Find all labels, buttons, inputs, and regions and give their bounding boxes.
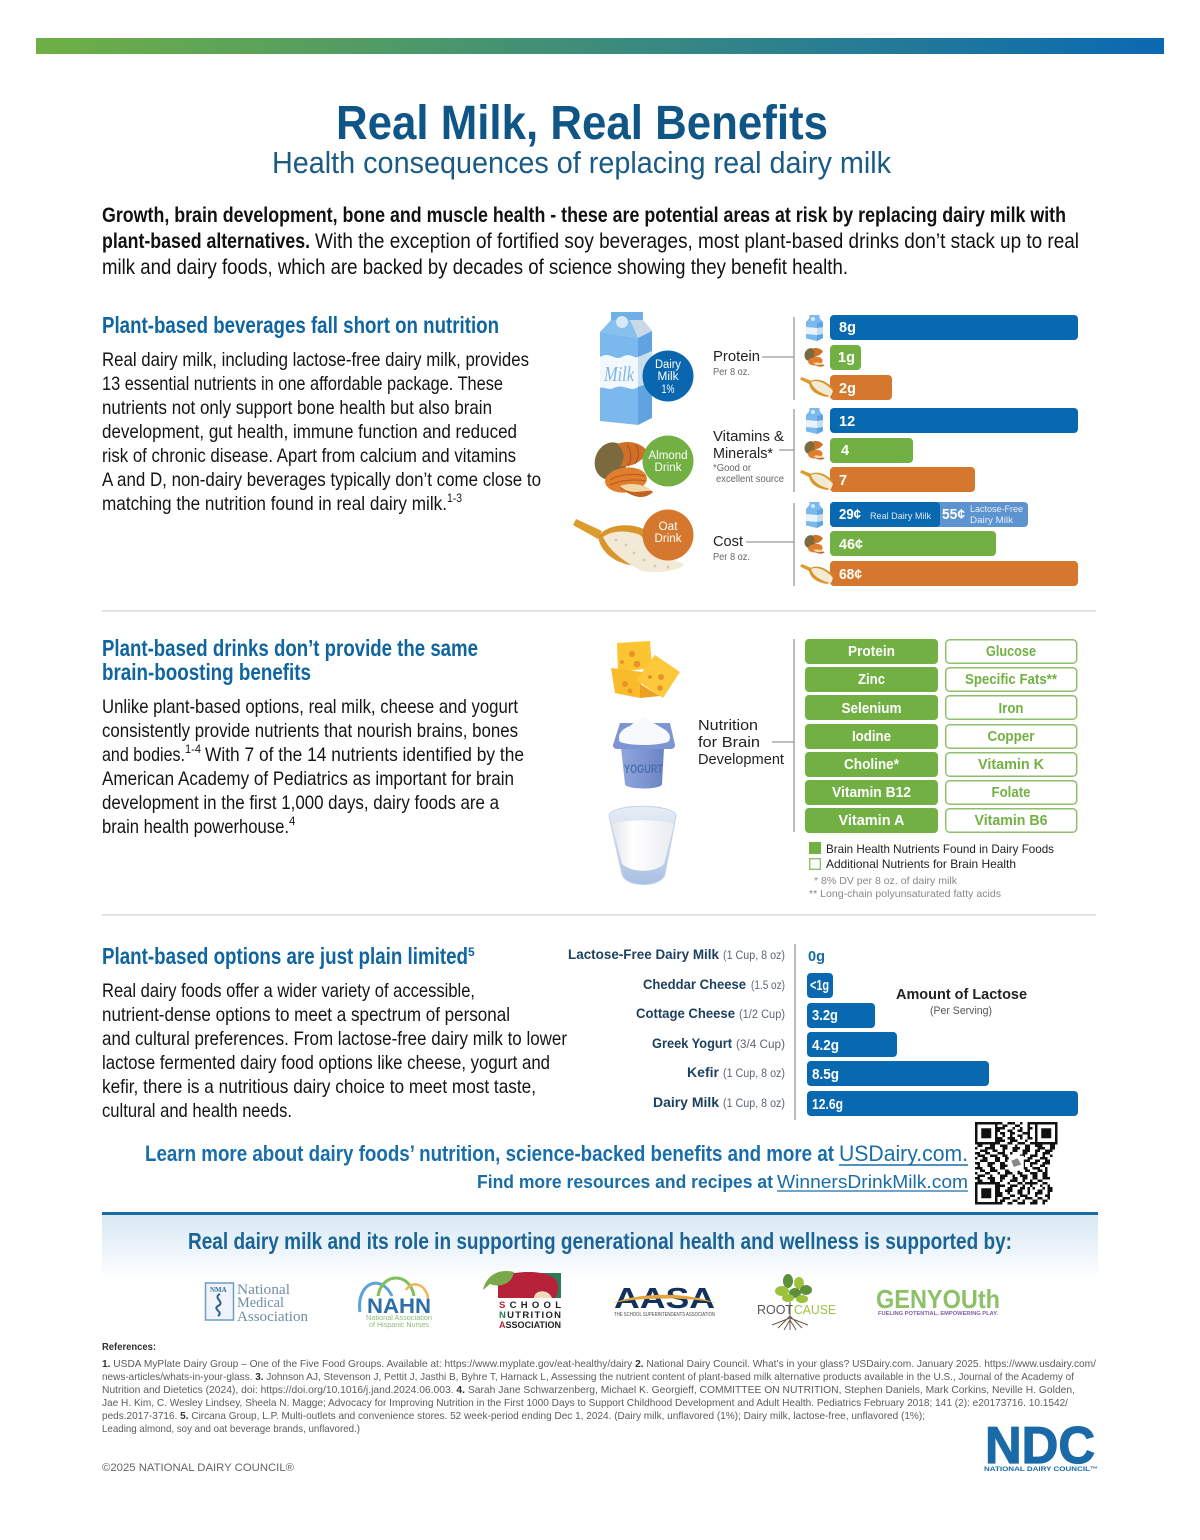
column: dairy nutrients: Choline* (844, 757, 899, 773)
row: dairy milk: (1 Cup, 8 oz) (723, 1098, 785, 1110)
logo: NAHN: National Association (366, 1313, 432, 1322)
logo: National Medical Association: National (237, 1282, 290, 1298)
body text: brain health: American Academy of Pediatrics as important for brain (102, 768, 514, 790)
column: additional nutrients: Glucose (986, 644, 1036, 660)
body text: dairy variety: cultural and health needs. (102, 1100, 292, 1122)
body text: dairy variety: kefir, there is a nutritious dairy choice to meet most taste, (102, 1076, 536, 1098)
references: Jae H. Kim, C. Wesley Lindsey, Sheela N. Magge; Advocacy for Improving Nutrition in the First 1000 Days to Support Childhood Development and Adult Health. Pediatrics February 2018; 141 (2): e20173716. 10.1542/ (102, 1397, 1068, 1409)
row: kefir: (1 Cup, 8 oz) (723, 1068, 785, 1080)
heading: brain-boosting benefits: brain-boosting benefits (102, 659, 311, 685)
panel: limited options text (102, 943, 567, 1122)
column: dairy nutrients (805, 639, 938, 833)
chart title: amount of lactose: Amount of Lactose (896, 986, 1027, 1003)
label: vitamins and minerals: Vitamins & (713, 428, 784, 445)
bar: dairy protein: 8g (839, 320, 856, 336)
chart title: amount of lactose (896, 986, 1027, 1017)
label: nutrition for brain development (698, 717, 785, 768)
references: peds.2017-3716. 5. Circana Group, L.P. Multi-outlets and convenience stores. 52 week-period ending Dec 1, 2024. (Dairy milk, unflavored (1%); Dairy milk, lactose-free, unflavored (1%); (102, 1410, 925, 1422)
bar: oat vitamins: 7 (839, 473, 847, 489)
icon: milk carton with badge (600, 312, 694, 425)
column: dairy nutrients: Iodine (852, 729, 891, 745)
heading: brain-boosting benefits (102, 635, 478, 685)
row: greek yogurt (652, 1032, 897, 1057)
row: greek yogurt: (3/4 Cup) (736, 1039, 785, 1051)
bar: almond cost: 46¢ (839, 537, 863, 553)
body text: brain health (102, 696, 524, 838)
logo: AASA: AASA (614, 1283, 715, 1315)
logo: School Nutrition Association: NUTRITION (499, 1310, 561, 1321)
icon: milk carton with badge: Dairy (655, 359, 681, 371)
row: cheddar cheese: <1g (810, 978, 829, 994)
supporters band (102, 1212, 1098, 1280)
icon: almonds with badge: Almond (648, 450, 688, 462)
bar: almond vitamins (830, 438, 913, 463)
body text: brain health: 4 (289, 816, 296, 828)
icon: glass of milk (609, 806, 676, 884)
column: additional nutrients: Vitamin K (978, 757, 1045, 773)
row: dairy milk (653, 1091, 1078, 1116)
body text: brain health: brain health powerhouse. (102, 816, 289, 838)
panel: plant-based beverages text (102, 312, 541, 515)
bar: oat vitamins (830, 467, 975, 492)
icon: oat scoop with badge: Oat (658, 521, 678, 533)
chart title: amount of lactose: (Per Serving) (930, 1005, 992, 1017)
chart: protein (713, 315, 1078, 400)
column: dairy nutrients: Zinc (858, 672, 885, 688)
column: additional nutrients: Copper (988, 729, 1035, 745)
legend: nutrient grid: Brain Health Nutrients Found in Dairy Foods (826, 842, 1054, 856)
bar: almond protein (830, 345, 861, 370)
bar: dairy cost: Real Dairy Milk (870, 511, 931, 522)
label: nutrition for brain development: Nutrition (698, 717, 758, 734)
label: protein: Per 8 oz. (713, 367, 750, 378)
row: greek yogurt: 4.2g (812, 1038, 839, 1054)
row: dairy milk: Dairy Milk (653, 1094, 719, 1110)
body text: nutrition: A and D, non-dairy beverages typically don’t come close to (102, 469, 541, 491)
call to action: WinnersDrinkMilk.com (777, 1172, 968, 1192)
body text: brain health: development in the first 1,000 days, dairy foods are a (102, 792, 499, 814)
body text: dairy variety: lactose fermented dairy food options like cheese, yogurt and (102, 1052, 550, 1074)
bar: dairy cost: 29¢ (839, 507, 861, 523)
label: nutrition for brain development: for Brain (698, 734, 760, 751)
row: cottage cheese: Cottage Cheese (636, 1005, 735, 1021)
row: lactose-free dairy milk (568, 946, 825, 965)
copyright: ©2025 NATIONAL DAIRY COUNCIL® (102, 1462, 294, 1474)
logo: The Root Cause Coalition (757, 1274, 836, 1330)
references (102, 1341, 1096, 1435)
bar: almond vitamins: 4 (841, 443, 849, 459)
label: cost: Per 8 oz. (713, 552, 750, 563)
column: additional nutrients: Folate (992, 785, 1030, 801)
body text: nutrition: matching the nutrition found in real dairy milk. (102, 493, 447, 515)
legend: nutrient grid: ** Long-chain polyunsaturated fatty acids (809, 888, 1001, 900)
bar: dairy cost: Dairy Milk (970, 515, 1013, 526)
logo: GENYOUth: FUELING POTENTIAL. EMPOWERING PLAY. (878, 1311, 999, 1317)
column: dairy nutrients: Selenium (842, 701, 902, 717)
row: cheddar cheese (643, 973, 833, 998)
panel: brain-boosting text (102, 635, 524, 838)
bar: oat protein: 2g (839, 381, 856, 397)
logo: School Nutrition Association: S CHOOL (499, 1300, 561, 1311)
label: protein: Protein (713, 348, 760, 365)
row: lactose-free dairy milk: (1 Cup, 8 oz) (723, 950, 785, 962)
column: additional nutrients: Vitamin B6 (974, 813, 1048, 829)
logo: AASA: THE SCHOOL SUPERINTENDENTS ASSOCIATION (614, 1312, 715, 1318)
label: nutrition for brain development: Development (698, 751, 785, 768)
label: vitamins and minerals: *Good or (713, 463, 752, 474)
logo: School Nutrition Association: ASSOCIATION (499, 1320, 561, 1331)
icon: milk carton with badge: 1% (662, 384, 674, 396)
intro paragraph: plant-based alternatives. (102, 230, 310, 253)
QR code (975, 1123, 1056, 1203)
legend: nutrient grid: Additional Nutrients for Brain Health (826, 857, 1016, 871)
row: cottage cheese: (1/2 Cup) (739, 1009, 785, 1021)
body text: nutrition: 13 essential nutrients in one affordable package. These (102, 373, 503, 395)
icon: almonds with badge: Drink (654, 462, 682, 474)
label: vitamins and minerals: excellent source (716, 474, 784, 485)
bar: dairy vitamins (830, 408, 1078, 433)
bar: dairy cost (830, 502, 1028, 527)
chart: nutrient grid (805, 639, 1077, 833)
body text: nutrition: nutrients not only support bone health but also brain (102, 397, 492, 419)
legend: nutrient grid (809, 842, 1054, 900)
row: kefir: 8.5g (812, 1067, 839, 1083)
call to action: Find more resources and recipes at (477, 1172, 773, 1192)
top gradient bar (36, 38, 1164, 54)
column: dairy nutrients: Vitamin B12 (832, 785, 911, 801)
body text: brain health: Unlike plant-based options, real milk, cheese and yogurt (102, 696, 518, 718)
subtitle: Health consequences of replacing real dairy milk (272, 145, 891, 180)
column: dairy nutrients: Vitamin A (838, 813, 905, 829)
heading: just plain limited: Plant-based options are just plain limited (102, 943, 468, 969)
row: kefir: Kefir (687, 1064, 720, 1080)
references: Nutrition and Dietetics (2024), doi: https://doi.org/10.1016/j.jand.2024.06.003. 4. Sarah Jane Schwarzenberg, Michael K. Georgieff, COMMITTEE ON NUTRITION, Stephen Daniels, Mark Corkins, Neville H. Golden, (102, 1384, 1075, 1396)
references: 1. USDA MyPlate Dairy Group – One of the Five Food Groups. Available at: https://www.myplate.gov/eat-healthy/dairy 2. National Dairy Council. What’s in your glass? USDairy.com. January 2025. https://www.usdairy.com/ (102, 1358, 1096, 1370)
logo: National Dairy Council: NDC (985, 1417, 1095, 1475)
logo: National Medical Association (206, 1282, 308, 1325)
bar: oat protein (830, 375, 892, 400)
body text: nutrition: risk of chronic disease. Apart from calcium and vitamins (102, 445, 516, 467)
row: lactose-free dairy milk: Lactose-Free Dairy Milk (568, 946, 719, 962)
icon: milk carton with badge: Milk (603, 362, 635, 386)
row: cheddar cheese: (1.5 oz) (751, 980, 785, 992)
chart: amount of lactose (568, 944, 1078, 1120)
logo: The Root Cause Coalition: ROOT (757, 1302, 793, 1317)
row: cottage cheese: 3.2g (812, 1008, 838, 1024)
body text: dairy variety (102, 980, 567, 1122)
bar: dairy cost: 55¢ (942, 507, 965, 523)
legend: nutrient grid: * 8% DV per 8 oz. of dairy milk (814, 875, 958, 887)
chart: cost (713, 502, 1078, 586)
bar: oat cost: 68¢ (839, 567, 862, 583)
body text: dairy variety: nutrient-dense options to meet a spectrum of personal (102, 1004, 510, 1026)
logo: NAHN: NAHN (367, 1295, 431, 1318)
body text: nutrition: Real dairy milk, including lactose-free dairy milk, provides (102, 349, 529, 371)
references: References: (102, 1341, 156, 1353)
row: lactose-free dairy milk: 0g (808, 949, 825, 965)
bar: dairy cost: Lactose-Free (970, 504, 1023, 515)
logo: NAHN: of Hispanic Nurses (369, 1320, 429, 1329)
logo: National Dairy Council: NATIONAL DAIRY COUNCIL™ (984, 1466, 1098, 1473)
label: cost: Cost (713, 533, 744, 550)
body text: nutrition: development, gut health, immune function and reduced (102, 421, 517, 443)
logo: National Medical Association: NMA (210, 1286, 227, 1294)
references: news-articles/whats-in-your-glass. 3. Johnson AJ, Stevenson J, Pettit J, Jasthi B, Byhre T, Harnack L, Assessing the nutrient content of plant-based milk alternative products available in the U.S., Journal of the Academy of (102, 1371, 1074, 1383)
intro paragraph: milk and dairy foods, which are backed by decades of science showing they benefit health. (102, 256, 848, 279)
logo: National Medical Association: Medical (237, 1295, 284, 1311)
label: cost (713, 533, 750, 563)
logo: The Root Cause Coalition: CAUSE (794, 1302, 836, 1317)
icon: yogurt cup: YOGURT (624, 762, 664, 776)
body text: nutrition (102, 349, 541, 515)
logo: School Nutrition Association (483, 1271, 561, 1331)
bar: dairy protein (830, 315, 1078, 340)
icon: yogurt cup (613, 716, 675, 788)
row: dairy milk: 12.6g (812, 1097, 843, 1113)
row: kefir (687, 1061, 989, 1086)
bar: oat cost (830, 561, 1078, 586)
column: additional nutrients (946, 640, 1077, 832)
column: additional nutrients: Specific Fats** (965, 672, 1057, 688)
intro paragraph (102, 204, 1079, 279)
title block (272, 97, 891, 180)
title: Real Milk, Real Benefits (336, 97, 828, 150)
body text: brain health: consistently provide nutrients that nourish brains, bones (102, 720, 518, 742)
icon: almonds with badge (589, 436, 694, 497)
icon: milk carton with badge: Milk (658, 371, 679, 383)
bar: almond protein: 1g (838, 350, 855, 366)
heading: fall short on nutrition: Plant-based beverages fall short on nutrition (102, 312, 499, 338)
icon: oat scoop with badge (573, 510, 694, 572)
call to action: USDairy.com. (839, 1141, 968, 1166)
logo: National Medical Association: Association (237, 1309, 308, 1325)
label: protein (713, 348, 760, 378)
call to action: Learn more about dairy foods’ nutrition, science-backed benefits and more at (145, 1141, 835, 1166)
icon: cheese (611, 641, 680, 698)
heading: just plain limited: 5 (468, 945, 475, 959)
heading: brain-boosting benefits: Plant-based drinks don’t provide the same (102, 635, 478, 661)
chart: vitamins and minerals (713, 408, 1078, 492)
bar: almond cost (830, 531, 996, 556)
row: greek yogurt: Greek Yogurt (652, 1035, 732, 1051)
body text: dairy variety: Real dairy foods offer a wider variety of accessible, (102, 980, 475, 1002)
column: additional nutrients: Iron (998, 701, 1024, 717)
body text: brain health: With 7 of the 14 nutrients identified by the (205, 744, 524, 766)
intro paragraph: With the exception of fortified soy beverages, most plant-based drinks don’t stack up to real (315, 230, 1079, 253)
body text: brain health: and bodies. (102, 744, 185, 766)
logo: GENYOUth: GENYOUth (876, 1284, 1000, 1314)
bar: dairy vitamins: 12 (839, 414, 855, 430)
body text: brain health: 1-4 (185, 744, 202, 756)
column: dairy nutrients: Protein (848, 644, 895, 660)
row: cottage cheese (636, 1003, 875, 1028)
heading: supported by: Real dairy milk and its role in supporting generational health and wellness is supported by: (188, 1228, 1012, 1254)
row: cheddar cheese: Cheddar Cheese (643, 976, 746, 992)
call to action (145, 1141, 968, 1192)
logo: NAHN (360, 1278, 432, 1329)
label: vitamins and minerals (713, 428, 784, 485)
body text: nutrition: 1-3 (447, 493, 462, 505)
references: Leading almond, soy and oat beverage brands, unflavored.) (102, 1423, 360, 1435)
body text: dairy variety: and cultural preferences. From lactose-free dairy milk to lower (102, 1028, 567, 1050)
label: vitamins and minerals: Minerals* (713, 445, 773, 462)
icon: oat scoop with badge: Drink (654, 533, 682, 545)
